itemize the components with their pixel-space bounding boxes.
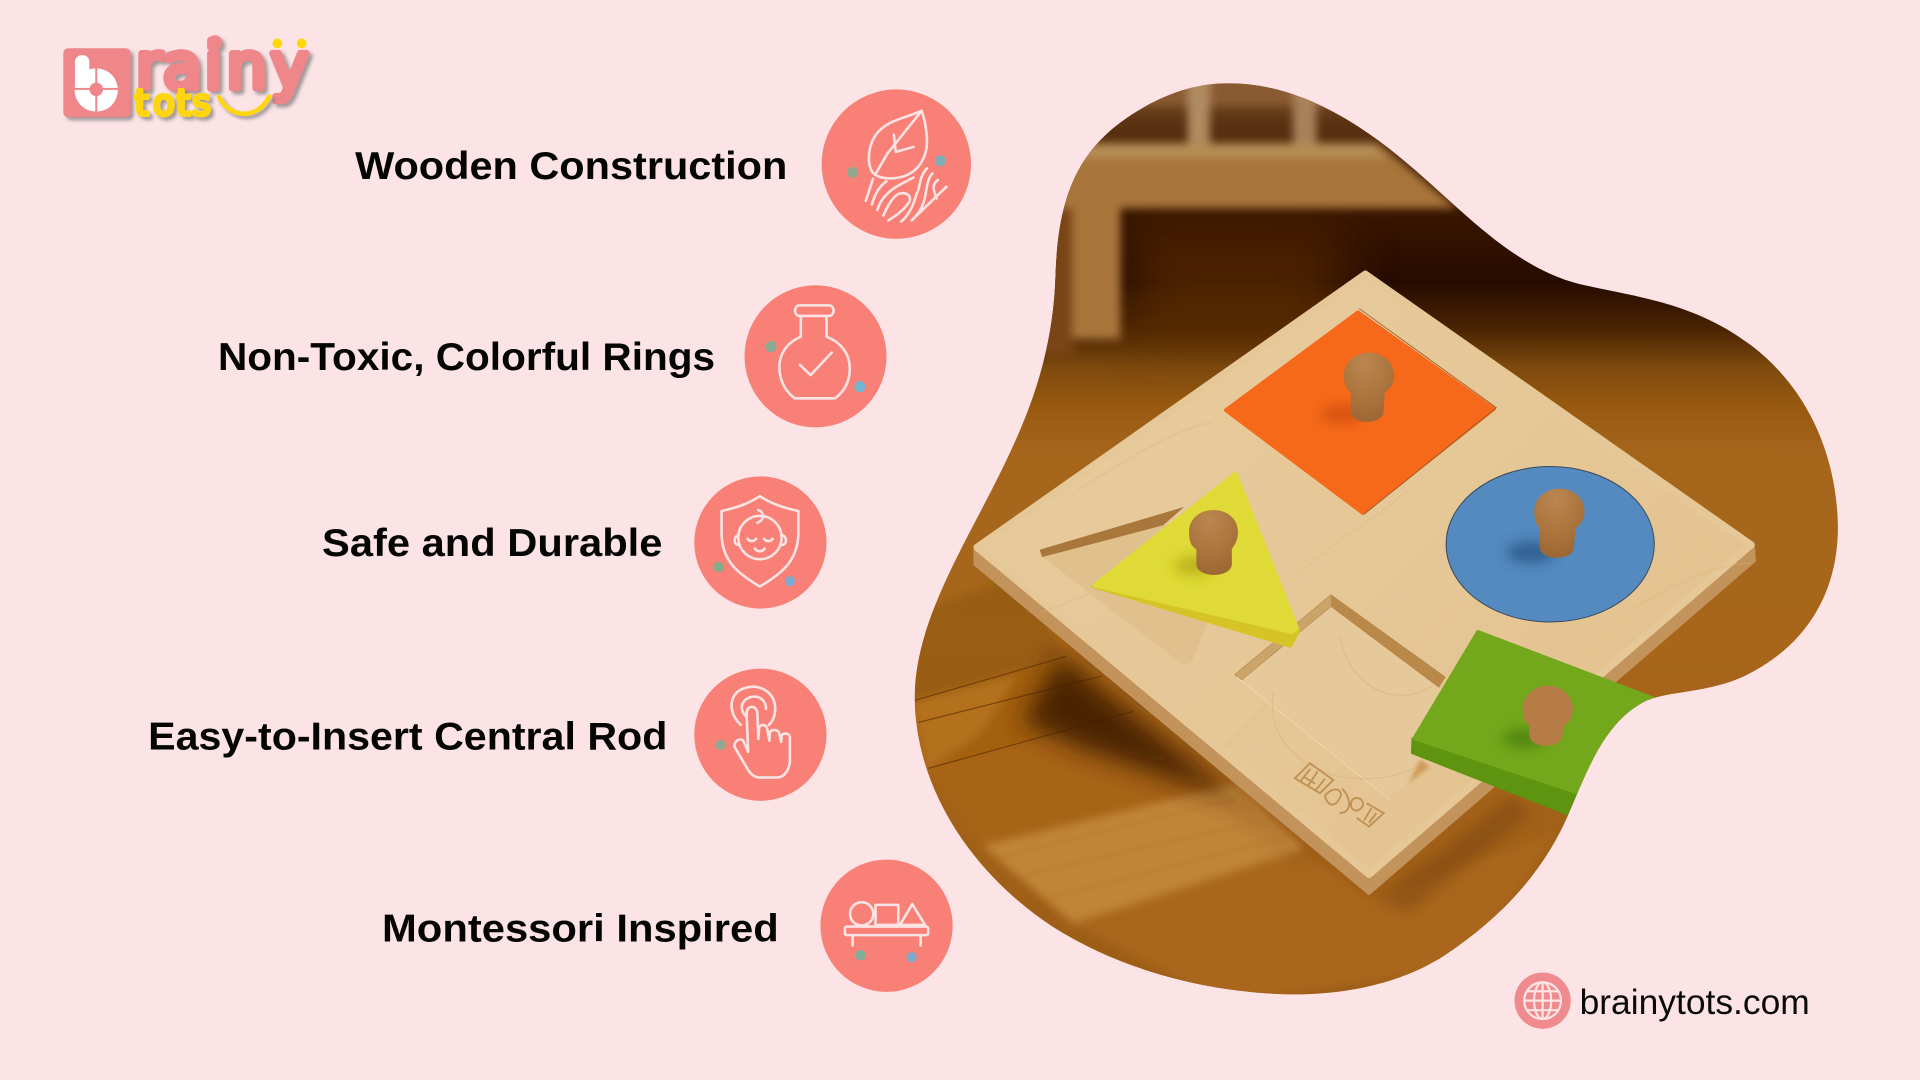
feature label: Wooden Construction: Wooden Construction xyxy=(355,145,787,188)
icon: shapes on shelf xyxy=(820,860,953,992)
feature label: Easy-to-Insert Central Rod: Easy-to-Insert Central Rod xyxy=(148,715,667,758)
icon: baby face in shield xyxy=(694,476,827,609)
website footer: brainytots.com xyxy=(1580,982,1810,1022)
yellow triangle piece xyxy=(1092,474,1299,647)
peg xyxy=(1189,510,1238,575)
logo: Brainy Tots: tots xyxy=(135,83,211,124)
feature label: Non-Toxic, Colorful Rings: Non-Toxic, Colorful Rings xyxy=(218,336,715,379)
feature label: Safe and Durable: Safe and Durable xyxy=(322,522,662,565)
peg xyxy=(1344,353,1394,422)
square cut-out xyxy=(1235,595,1469,800)
icon: globe xyxy=(1514,972,1571,1029)
green square piece xyxy=(1412,632,1668,817)
engraved maker mark xyxy=(1295,763,1384,827)
floor planks xyxy=(906,576,1555,1004)
triangle cut-out xyxy=(1040,507,1224,665)
icon: flask with check xyxy=(744,285,887,427)
peg xyxy=(1534,489,1584,558)
peg xyxy=(1523,686,1573,746)
blue circle piece xyxy=(1446,467,1654,622)
orange square piece xyxy=(1226,309,1496,514)
icon: finger tap xyxy=(694,669,827,801)
logo: Brainy Tots: rainy xyxy=(136,30,308,104)
photo background: shelf and table xyxy=(894,73,1861,1004)
wood grain xyxy=(1041,422,1751,747)
feature label: Montessori Inspired: Montessori Inspired xyxy=(382,908,779,951)
puzzle board xyxy=(975,274,1755,894)
website footer xyxy=(1514,972,1810,1029)
logo: Brainy Tots xyxy=(63,30,308,124)
photo: wooden shape puzzle in blob frame xyxy=(894,73,1861,1004)
icon: leaf and wood grain xyxy=(822,89,971,239)
